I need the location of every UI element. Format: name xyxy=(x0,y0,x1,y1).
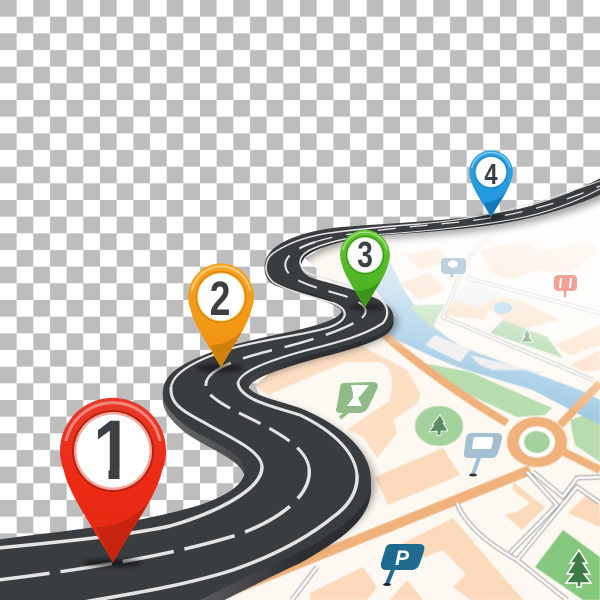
pin 3 number: 3 xyxy=(357,235,373,275)
pin 1 shadow xyxy=(83,559,143,567)
peach blocks: upper map xyxy=(255,240,600,600)
icon: trophy sign xyxy=(336,382,378,418)
gray blocks xyxy=(425,295,539,374)
pin 2 orange xyxy=(188,263,254,372)
road shadow on map xyxy=(238,194,600,594)
dark green park xyxy=(535,530,600,600)
icon: tree in circle xyxy=(429,415,448,435)
pin 4 number: 4 xyxy=(484,158,498,191)
pin 2 body xyxy=(188,263,254,368)
pin 3 green xyxy=(340,230,390,310)
pin 2 number: 2 xyxy=(210,273,230,326)
road xyxy=(0,176,600,600)
fade overlay for far map xyxy=(375,198,600,410)
orange streets xyxy=(203,335,600,600)
map base xyxy=(224,208,600,600)
pin 1 red xyxy=(60,398,166,567)
icon: parking sign xyxy=(381,544,424,586)
road centre dashes xyxy=(0,186,600,580)
map features xyxy=(203,236,600,600)
icon: red restaurant sign xyxy=(554,275,577,297)
pin 4 body xyxy=(469,150,513,217)
icon: big pine tree xyxy=(566,550,591,587)
roundabout xyxy=(507,417,567,467)
river xyxy=(375,260,566,385)
city map xyxy=(224,194,600,600)
pin 1 body xyxy=(60,398,166,563)
river crossing overlay xyxy=(493,370,600,425)
road side thickness xyxy=(0,176,600,600)
pin 3 shadow xyxy=(348,304,384,310)
upper grid lines xyxy=(443,238,600,380)
icon: blue sign far xyxy=(441,258,466,277)
pin 1 number: 1 xyxy=(93,402,133,497)
pin 4 blue xyxy=(469,150,513,219)
pin 3 body xyxy=(340,230,390,308)
road surface xyxy=(0,176,600,600)
pin 2 shadow xyxy=(196,364,244,372)
icon: small tree in park xyxy=(521,329,533,342)
icon: parking sign: P xyxy=(395,547,410,570)
road side lines xyxy=(0,181,600,600)
icon: bus sign xyxy=(464,433,502,476)
pin 4 shadow xyxy=(477,215,505,219)
green areas xyxy=(410,304,600,462)
pond xyxy=(494,302,512,314)
street grid lines xyxy=(292,472,600,600)
